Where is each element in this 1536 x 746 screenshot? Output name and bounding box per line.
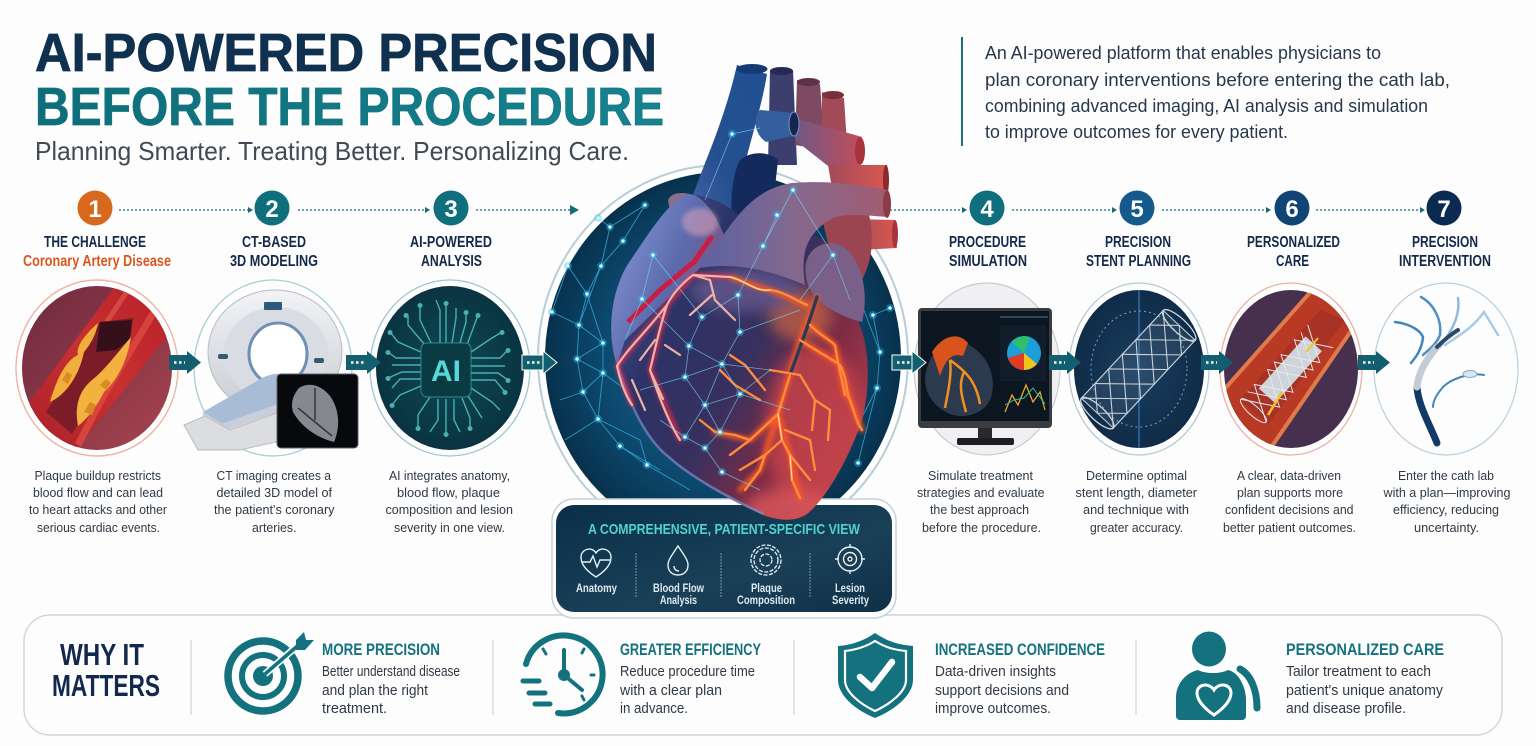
step descriptions: AI integrates anatomy, xyxy=(389,468,510,483)
step descriptions: stent length, diameter xyxy=(1076,485,1198,500)
panel: comprehensive patient-specific view xyxy=(552,499,896,618)
step descriptions xyxy=(29,468,1510,535)
icon: blood flow drop xyxy=(668,546,688,575)
step headings: PRECISION xyxy=(1105,234,1171,251)
increased confidence text: improve outcomes. xyxy=(935,701,1051,717)
step number badges: 7 xyxy=(1437,196,1451,223)
step descriptions: confident decisions and xyxy=(1225,502,1354,517)
step headings: STENT PLANNING xyxy=(1086,253,1191,270)
heading: WHY IT xyxy=(60,637,144,672)
increased confidence text xyxy=(935,640,1105,717)
step headings: AI-POWERED xyxy=(410,234,492,251)
central network circle xyxy=(537,165,909,498)
intro paragraph: An AI-powered platform that enables physicians to xyxy=(985,42,1381,63)
illustration: plaque in artery xyxy=(16,280,178,456)
step descriptions: plan supports more xyxy=(1237,485,1343,500)
step headings xyxy=(23,234,1491,270)
personalized care text: patient's unique anatomy xyxy=(1286,683,1444,699)
arrow 7 xyxy=(1358,351,1390,374)
more precision text: MORE PRECISION xyxy=(322,640,440,659)
step descriptions: Determine optimal xyxy=(1086,468,1187,483)
step headings: CARE xyxy=(1276,253,1309,270)
step headings: PRECISION xyxy=(1412,234,1478,251)
icon: lesion target xyxy=(835,544,865,574)
title xyxy=(35,23,664,137)
personalized care text: and disease profile. xyxy=(1286,701,1406,717)
panel: comprehensive patient-specific view: Anatomy xyxy=(576,583,618,595)
step number badges: 2 xyxy=(265,196,279,223)
panel: comprehensive patient-specific view: Composition xyxy=(737,595,795,607)
icon: person with heart xyxy=(1176,632,1257,720)
icon: plaque cluster xyxy=(751,545,781,575)
panel: comprehensive patient-specific view: Analysis xyxy=(660,595,697,607)
panel: comprehensive patient-specific view: Plaque xyxy=(751,583,782,595)
step descriptions: severity in one view. xyxy=(394,520,505,535)
step descriptions: the best approach xyxy=(930,502,1029,517)
intro paragraph: plan coronary interventions before entering the cath lab, xyxy=(985,69,1450,90)
more precision text: Better understand disease xyxy=(322,664,460,680)
increased confidence text: Data-driven insights xyxy=(935,664,1056,680)
heading xyxy=(52,637,160,703)
illustration: AI chip: AI xyxy=(431,355,461,388)
step descriptions: efficiency, reducing xyxy=(1393,502,1499,517)
subtitle: Planning Smarter. Treating Better. Personalizing Care. xyxy=(35,136,629,166)
step descriptions: CT imaging creates a xyxy=(216,468,332,483)
step descriptions: Plaque buildup restricts xyxy=(34,468,161,483)
greater efficiency text xyxy=(619,640,761,717)
arrow 5 xyxy=(1049,351,1081,374)
panel: comprehensive patient-specific view: Blood Flow xyxy=(653,583,704,595)
arrow 2 xyxy=(346,351,381,374)
illustration: stent deployed in artery xyxy=(1220,283,1362,455)
illustration: AI chip xyxy=(370,280,530,456)
greater efficiency text: with a clear plan xyxy=(619,683,722,699)
more precision text: treatment. xyxy=(322,701,387,717)
greater efficiency text: Reduce procedure time xyxy=(620,664,755,680)
coronary vessels xyxy=(617,275,862,498)
step headings: INTERVENTION xyxy=(1399,253,1491,270)
step headings: Coronary Artery Disease xyxy=(23,253,171,270)
step headings: THE CHALLENGE xyxy=(44,234,146,251)
step descriptions: before the procedure. xyxy=(922,520,1041,535)
step number badges xyxy=(78,190,1462,226)
coronary glow xyxy=(617,275,862,498)
ventricle body xyxy=(611,194,868,520)
intro paragraph: to improve outcomes for every patient. xyxy=(985,121,1288,142)
step descriptions: uncertainty. xyxy=(1414,520,1479,535)
central heart illustration xyxy=(611,64,898,532)
step headings: CT-BASED xyxy=(242,234,306,251)
aortic arch xyxy=(700,182,888,285)
step number badges: 1 xyxy=(88,196,102,223)
step number badges: 5 xyxy=(1130,196,1144,223)
icon: target xyxy=(228,632,314,711)
intro paragraph xyxy=(961,37,1450,146)
step headings: ANALYSIS xyxy=(421,253,482,270)
timeline connectors xyxy=(119,205,1425,215)
step descriptions: strategies and evaluate xyxy=(917,485,1044,500)
step descriptions: the patient's coronary xyxy=(214,502,335,517)
greater efficiency text: GREATER EFFICIENCY xyxy=(620,640,761,659)
heading: MATTERS xyxy=(52,668,160,703)
step number badges: 4 xyxy=(980,196,994,223)
personalized care text: PERSONALIZED CARE xyxy=(1286,640,1444,659)
illustration: catheter xyxy=(1374,283,1518,455)
increased confidence text: support decisions and xyxy=(935,683,1069,699)
illustration: simulation monitor xyxy=(914,283,1060,455)
step number badges: 3 xyxy=(444,196,458,223)
step descriptions: A clear, data-driven xyxy=(1237,468,1341,483)
step headings: PERSONALIZED xyxy=(1247,234,1340,251)
panel: comprehensive patient-specific view: Lesion xyxy=(835,583,865,595)
left atrium bump xyxy=(668,193,700,222)
step descriptions: with a plan—improving xyxy=(1383,485,1510,500)
icon: shield xyxy=(838,633,913,718)
step descriptions: blood flow and can lead xyxy=(33,485,163,500)
arrow 1 xyxy=(169,351,201,374)
step headings: PROCEDURE xyxy=(949,234,1026,251)
more precision text xyxy=(322,640,460,717)
step descriptions: better patient outcomes. xyxy=(1223,520,1356,535)
intro paragraph: combining advanced imaging, AI analysis and simulation xyxy=(985,95,1428,116)
step descriptions: composition and lesion xyxy=(386,502,513,517)
step descriptions: arteries. xyxy=(252,520,296,535)
panel: why it matters xyxy=(24,615,1502,735)
title: AI-POWERED PRECISION xyxy=(35,23,657,83)
illustration: CT scanner xyxy=(184,280,358,456)
illustration: stent xyxy=(1069,283,1209,455)
increased confidence text: INCREASED CONFIDENCE xyxy=(935,640,1105,659)
step descriptions: blood flow, plaque xyxy=(397,485,500,500)
more precision text: and plan the right xyxy=(322,683,428,699)
panel: comprehensive patient-specific view: Severity xyxy=(832,595,869,607)
step descriptions: detailed 3D model of xyxy=(216,485,332,500)
greater efficiency text: in advance. xyxy=(620,701,688,717)
right atrial appendage xyxy=(805,243,865,322)
superior vena cava xyxy=(690,64,799,245)
icon: clock xyxy=(523,635,603,713)
step descriptions: Simulate treatment xyxy=(928,468,1033,483)
step descriptions: serious cardiac events. xyxy=(37,520,160,535)
personalized care text xyxy=(1286,640,1444,717)
back vessels xyxy=(768,67,898,280)
personalized care text: Tailor treatment to each xyxy=(1286,664,1431,680)
step descriptions: and technique with xyxy=(1083,502,1189,517)
step descriptions: to heart attacks and other xyxy=(29,502,168,517)
panel: comprehensive patient-specific view: A COMPREHENSIVE, PATIENT-SPECIFIC VIEW xyxy=(588,521,861,538)
step descriptions: Enter the cath lab xyxy=(1398,468,1494,483)
step headings: 3D MODELING xyxy=(230,253,318,270)
title: BEFORE THE PROCEDURE xyxy=(35,77,664,137)
icon: anatomy heart xyxy=(581,549,611,577)
arrow 3 xyxy=(522,351,557,374)
step number badges: 6 xyxy=(1285,196,1299,223)
arrow 4 xyxy=(892,351,926,374)
network over heart xyxy=(625,128,850,490)
step headings: SIMULATION xyxy=(949,253,1027,270)
arrow 6 xyxy=(1201,351,1233,374)
step descriptions: greater accuracy. xyxy=(1090,520,1183,535)
